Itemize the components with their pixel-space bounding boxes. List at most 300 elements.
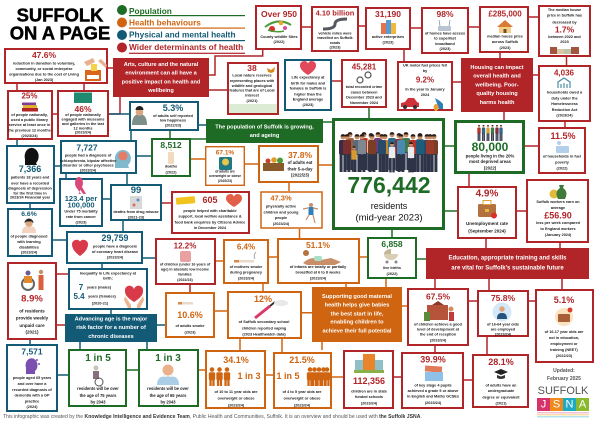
text: comparison: to England workers <box>540 227 576 231</box>
text: Reduction Act <box>552 108 578 112</box>
text: Under 75 mortality <box>64 210 99 214</box>
text <box>64 210 99 224</box>
icon: terraced houses <box>550 47 579 54</box>
icon: donation box <box>84 58 107 81</box>
icon: heart hands <box>226 194 242 207</box>
text: people had a diagnosis of <box>65 154 112 158</box>
panel: fuel poverty <box>539 128 585 173</box>
text: females in Suffolk is <box>290 87 326 91</box>
text: total recorded crime <box>346 85 382 89</box>
number: 12.2% <box>174 242 196 250</box>
panel: arts heading: environment can all have a <box>125 70 198 76</box>
text: with learning <box>16 240 41 244</box>
text: comparison: (January 2024) <box>545 233 572 237</box>
number: 38 <box>247 63 257 73</box>
panel: education heading: are vital for Suffolk's sustainable future <box>451 266 564 272</box>
panel: broadband <box>422 8 468 53</box>
number: 100,000 <box>67 200 95 210</box>
text: 2023/24 Financial year <box>10 196 51 200</box>
panel: child poverty <box>156 239 215 284</box>
text: of key stage 4 pupils <box>414 383 452 387</box>
text <box>547 8 582 25</box>
panel: wildlife sites <box>256 6 301 49</box>
number: 67.1% <box>216 150 234 156</box>
panel: live births <box>368 238 416 278</box>
text: (2021) <box>25 330 39 334</box>
text: in English and Maths GCSEs <box>407 394 459 398</box>
number: 21.5% <box>289 355 315 365</box>
number: 7,366 <box>19 164 41 174</box>
icon: fruit crate <box>263 157 284 171</box>
panel: maternal health heading: enabling children to <box>330 320 384 326</box>
panel: dementia <box>7 345 57 411</box>
text <box>288 160 313 178</box>
values <box>73 283 117 306</box>
text: UK motor fuel prices fell <box>403 64 447 68</box>
text: (2022/23) <box>165 124 182 128</box>
panel: motor fuel <box>398 62 452 111</box>
text <box>77 386 119 404</box>
panel: degree <box>473 355 528 407</box>
legend: Population <box>129 6 172 16</box>
text: organisations due to the cost of Living <box>9 72 80 76</box>
text: of adults smoke <box>176 324 204 328</box>
number: 6,858 <box>381 239 403 249</box>
text <box>290 265 347 280</box>
icon: cigarette <box>178 302 193 304</box>
text: support, local welfare assistance & <box>178 214 242 218</box>
text: for the first time in <box>13 191 47 195</box>
icon: five figures <box>307 367 330 386</box>
text: (2021-23) <box>128 216 145 220</box>
icon: butterfly <box>267 67 275 73</box>
updated note: February 2025 <box>547 376 581 382</box>
panel: maternal health heading: achieve their full potential <box>322 328 392 334</box>
text: duty under the <box>551 97 578 101</box>
text: (2023 Healthwatch data) <box>242 332 286 336</box>
icon: heart <box>300 61 316 75</box>
text: dementia with a GP <box>14 393 50 397</box>
icon: school with children <box>424 301 454 321</box>
text <box>263 205 299 226</box>
text <box>11 235 48 255</box>
panel: crime <box>342 60 386 107</box>
values: years (females) <box>88 294 117 298</box>
text: (2022) <box>387 272 398 276</box>
text: (2023/24) <box>228 403 245 407</box>
icon: chalkboard <box>74 92 92 103</box>
panel: employment <box>478 291 528 337</box>
panel: school readiness <box>408 289 468 345</box>
text: (2022) <box>484 166 497 170</box>
text: Unemployment rate <box>466 221 508 226</box>
number: 12% <box>254 294 272 304</box>
text: travelled on Suffolk <box>317 36 354 40</box>
text <box>260 35 298 44</box>
text: the age of 65 years <box>150 393 187 398</box>
icon: older man <box>157 364 179 385</box>
text <box>383 266 401 276</box>
text <box>487 34 523 50</box>
text <box>229 74 275 103</box>
number: 7,571 <box>21 346 43 356</box>
icon: meadow <box>229 104 277 113</box>
panel: housing heading: wellbeing. Poor- <box>474 82 519 88</box>
text: recorded diagnosis of <box>12 388 53 392</box>
legend: Wider determinants of health <box>129 42 243 52</box>
number: 1 in 5 <box>85 353 111 364</box>
text: food bank enquiries by Citizens Advice <box>175 220 245 224</box>
text: children and young <box>263 210 299 214</box>
icon: scales <box>219 157 232 170</box>
text: (2023/24) <box>21 134 38 138</box>
text: of adults are <box>215 170 235 174</box>
number: 6.4% <box>237 242 255 252</box>
text <box>92 245 138 260</box>
text: (September 2024) <box>468 228 506 234</box>
number: 29,759 <box>102 233 129 243</box>
number: 46% <box>74 104 92 114</box>
number: 7,727 <box>76 142 98 152</box>
panel: house price <box>480 7 528 52</box>
text: of 4 to 5 year olds are <box>282 390 322 394</box>
values: 7 <box>79 283 84 292</box>
icon: family under roof <box>558 78 570 88</box>
number: 6.6% <box>21 211 37 218</box>
icon: road <box>323 19 347 29</box>
text: disorder or other psychoses <box>62 164 114 168</box>
text: community, or social enterprise <box>15 67 73 71</box>
text: the age of 75 years <box>80 393 117 398</box>
text: Local nature reserves <box>232 74 272 78</box>
panel: state schools <box>344 351 393 408</box>
number: 4.10 billion <box>316 8 355 18</box>
text: children reported vaping <box>242 327 287 331</box>
text: (2023/24) <box>107 256 124 260</box>
text: Homelessness <box>551 102 578 106</box>
text <box>482 383 520 406</box>
text: not in education, <box>549 336 579 340</box>
logo: Suffolk JSNA: S <box>553 398 560 410</box>
logo: Suffolk JSNA: SUFFOLK <box>538 385 589 397</box>
text: (2023/24) <box>361 402 378 406</box>
illustration: crowd of people <box>339 132 438 172</box>
legend <box>117 5 245 54</box>
text: of children (under 16 years of <box>160 262 211 266</box>
panel: 1 in 5 over 75 <box>69 350 126 406</box>
icon: exercising person <box>303 203 318 223</box>
panel: housing heading: harms health <box>480 100 515 106</box>
logo: Suffolk JSNA: N <box>566 398 574 410</box>
text: of residents <box>19 308 45 314</box>
text: (2023/24) <box>430 338 447 342</box>
text <box>8 176 53 200</box>
panel: physically active <box>261 192 322 228</box>
icon: head silhouette <box>25 148 39 165</box>
text: period <box>548 35 581 44</box>
icon: house <box>497 20 513 33</box>
text: of 16-64 year olds <box>487 322 519 326</box>
panel: smoking in pregnancy <box>224 240 268 283</box>
text <box>176 324 204 335</box>
updated note <box>547 368 581 382</box>
text: undergraduate <box>488 389 514 393</box>
text: of households in fuel <box>543 155 581 159</box>
title: SUFFOLK <box>17 4 104 26</box>
text: during pregnancy <box>230 271 263 275</box>
text: over have a recorded <box>11 181 50 185</box>
number: 4,036 <box>554 68 575 78</box>
text: (2023/24) <box>273 222 290 226</box>
text: of people nationally, <box>11 113 48 117</box>
number: 34.1% <box>223 355 249 365</box>
number: 47.3% <box>270 194 292 202</box>
number: 5.1% <box>554 295 574 305</box>
panel: deaths <box>152 139 190 176</box>
text <box>60 154 116 172</box>
text: of mothers smoke <box>230 265 262 269</box>
text <box>543 155 581 170</box>
text: disabilities <box>19 246 39 250</box>
text: of coronary heart disease <box>92 250 138 254</box>
icon: vape <box>255 300 288 318</box>
number: 45,281 <box>352 62 377 72</box>
text: provide weekly <box>16 316 49 320</box>
icon: briefcase <box>478 200 497 218</box>
icon: handcuffs <box>357 72 371 83</box>
panel: housing heading: quality housing <box>476 91 518 97</box>
text: (2024) <box>27 405 38 409</box>
panel: housing heading <box>461 58 533 112</box>
text: Inequality in Life expectancy at <box>80 272 137 276</box>
number: 98% <box>436 9 454 19</box>
number: 80,000 <box>472 140 509 154</box>
text: (2022/23) <box>291 172 310 178</box>
panel: adult weight <box>206 147 244 185</box>
text: reduction in donation to voluntary, <box>13 62 75 66</box>
text: cases between <box>351 90 378 94</box>
text: of children achieve a good <box>414 322 463 326</box>
icon: anatomical heart <box>72 240 88 256</box>
icon: graduation cap <box>494 369 508 379</box>
text: deaths <box>165 164 177 168</box>
text: service at least once in <box>9 123 51 127</box>
text <box>547 90 583 118</box>
text: breastfed at 6 to 8 weeks <box>296 271 340 275</box>
text <box>16 308 49 334</box>
panel: arts heading: wellbeing <box>147 88 174 94</box>
panel: year 6 weight <box>206 351 265 408</box>
text: most deprived areas <box>469 159 512 164</box>
icon: three figures <box>209 367 230 386</box>
panel: drug deaths <box>111 185 161 220</box>
text: (2023) <box>330 46 341 50</box>
panel: 5-a-day <box>259 146 318 182</box>
text: Suffolk workers earn on <box>536 200 580 204</box>
text: of Suffolk secondary school <box>239 320 289 324</box>
text <box>407 383 459 405</box>
panel: deprived areas <box>456 122 524 172</box>
text: people <box>275 216 287 220</box>
panel: cancer mortality <box>60 177 102 226</box>
panel: arts heading: positive impact on health and <box>122 80 201 86</box>
panel: arts heading: Arts, culture and the natural <box>124 62 199 68</box>
icon: candle <box>168 148 174 164</box>
icon: carer with wheelchair <box>22 270 44 290</box>
text: average <box>551 206 565 210</box>
panel: maternal health heading: health helps give babies <box>325 302 389 308</box>
text: birth: <box>103 277 113 281</box>
text: (2023) <box>185 331 196 335</box>
text: residents will be over <box>147 386 189 391</box>
text <box>372 35 404 44</box>
number: 99 <box>131 185 141 196</box>
panel: adult smoking <box>166 293 214 337</box>
text <box>113 210 159 220</box>
footer: This infographic was created by the Knowledge Intelligence and Evidence Team, Public Health and Communities, Suffolk. It is an overview and should be used with the Suffolk JSNA. <box>3 414 422 420</box>
text: (2022/23) <box>177 278 193 282</box>
text: across Suffolk <box>492 40 519 44</box>
values: 5.4 <box>73 292 85 301</box>
panel: arts heading <box>113 58 209 97</box>
number: 5.3% <box>163 103 183 113</box>
panel: 1 in 3 over 65 <box>139 350 198 406</box>
panel: learning disabilities <box>8 209 52 256</box>
number: 51.1% <box>306 240 330 250</box>
text <box>160 262 211 282</box>
panel: vaping <box>228 292 301 338</box>
icon: cigarette <box>234 252 256 262</box>
text <box>425 32 465 51</box>
text: (2022) <box>166 170 177 174</box>
text: their 5-a-day <box>288 166 313 172</box>
icon: school building <box>354 354 384 373</box>
panel: coronary heart disease <box>67 232 142 263</box>
text: (2023/24) <box>238 276 255 280</box>
icon: buildings <box>381 20 396 34</box>
text <box>317 32 354 50</box>
text: low happiness <box>160 118 186 122</box>
text: vehicle miles were <box>318 32 352 36</box>
text: age) in absolute low income <box>161 267 209 271</box>
text: residents <box>371 201 408 211</box>
panel: vehicle miles <box>312 7 358 51</box>
panel: unemployment <box>458 187 516 238</box>
panel: life expectancy <box>285 60 331 110</box>
text <box>290 76 326 107</box>
text: used a public library <box>11 118 49 122</box>
text: of 16-17 year olds are <box>545 330 583 334</box>
number: 28.1% <box>488 357 514 367</box>
number: 11.5% <box>550 131 576 141</box>
text: price in Suffolk has <box>547 14 582 18</box>
number <box>65 194 97 210</box>
text: (Jan 2023) <box>35 78 54 82</box>
text: employment or <box>550 342 578 346</box>
text: the previous 12 months <box>8 128 51 132</box>
text: representing places with <box>230 79 275 83</box>
text: (2023) <box>500 46 511 50</box>
panel: advancing age heading <box>65 314 157 342</box>
panel: education heading <box>426 248 589 279</box>
text: and galleries in the last <box>62 122 105 126</box>
panel: psychoses <box>60 141 136 173</box>
text: schizophrenia, bipolar affective <box>60 159 116 163</box>
text <box>487 322 519 337</box>
text: practice <box>25 399 39 403</box>
text: England average <box>293 98 323 102</box>
text <box>355 201 423 224</box>
text: (2022/23) <box>556 354 573 358</box>
connectors <box>17 17 566 380</box>
text <box>209 170 241 183</box>
text: period <box>405 88 446 97</box>
text: by <box>423 69 428 73</box>
text <box>165 164 177 174</box>
text: of adults eat <box>288 160 313 165</box>
text: live births <box>383 266 401 270</box>
logo: Suffolk JSNA <box>537 385 589 418</box>
text: of infants are totally or partially <box>290 265 347 269</box>
icon: head with brain <box>115 150 131 168</box>
text: period: 2023 <box>560 40 569 44</box>
number: 47.6% <box>32 50 56 60</box>
text: degree or equivalent <box>482 396 520 400</box>
text <box>414 322 463 342</box>
text: wildlife and geological <box>231 84 272 88</box>
text: deaths from drug misuse <box>113 210 159 214</box>
number: 8,512 <box>160 140 182 150</box>
icon: exam papers <box>425 365 443 381</box>
panel: residents <box>334 120 444 228</box>
panel: population heading: The population of Suffolk is growing, <box>215 124 314 130</box>
icon: router <box>438 20 451 31</box>
number: 112,356 <box>353 376 385 386</box>
text: interest <box>245 94 260 98</box>
text: comparison: less per week compared <box>536 221 581 225</box>
text: higher than the <box>294 92 322 96</box>
text <box>153 114 194 128</box>
panel: reception weight <box>274 353 331 408</box>
icon: money bags <box>550 185 566 199</box>
text: birth for males and <box>291 81 326 85</box>
number: 10.6% <box>177 310 203 320</box>
text <box>147 386 189 404</box>
text: comparison <box>536 221 581 237</box>
text: (2023) <box>383 40 394 44</box>
text: (2023/24) <box>495 333 512 337</box>
text: training (NEET) <box>550 348 579 352</box>
panel: population heading: and ageing <box>250 133 280 139</box>
text <box>80 272 137 281</box>
text: (2021) <box>247 99 258 103</box>
panel: depression <box>7 146 54 203</box>
panel: museums <box>58 91 108 136</box>
panel: inequality in life expectancy <box>69 269 147 309</box>
text <box>282 390 322 407</box>
text: overweight or obese <box>209 174 241 178</box>
text: of people nationally <box>65 113 102 117</box>
text: (2022) <box>557 166 568 170</box>
text: people helped with charitable <box>183 209 237 213</box>
text: broadband <box>435 42 455 46</box>
text: the end of reception <box>420 333 457 337</box>
panel: low happiness <box>130 102 198 130</box>
text: (2023/24) <box>556 114 573 118</box>
text: physically active <box>266 205 296 209</box>
title <box>10 4 110 44</box>
text: achieved a grade 5 or above <box>408 389 458 393</box>
